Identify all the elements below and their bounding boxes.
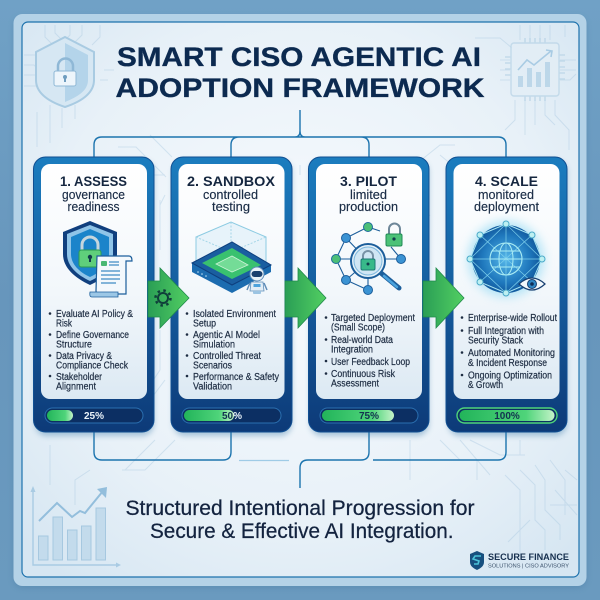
icon: logo shield — [470, 551, 484, 570]
tagline — [126, 497, 475, 543]
bullet list: Controlled Threat — [193, 351, 261, 362]
bullet list — [49, 309, 133, 392]
heading: 3. PILOT — [340, 174, 398, 189]
bottom connector lines — [94, 432, 506, 488]
bullet list: Security Stack — [468, 336, 524, 346]
bullet list — [461, 313, 557, 391]
subtitle: readiness — [68, 200, 120, 214]
arrow 2 — [285, 268, 326, 328]
bullet list: Risk — [56, 318, 73, 330]
tagline: Secure & Effective AI Integration. — [150, 520, 454, 543]
decorative shield icon — [36, 37, 94, 107]
bullet list: Scenarios — [193, 360, 232, 372]
bullet list: Real-world Data — [331, 335, 393, 346]
subtitle: limited — [350, 188, 387, 202]
bullet list: Stakeholder — [56, 372, 103, 383]
bullet list — [325, 313, 415, 390]
panel: card 3 pilot — [308, 157, 429, 436]
bullet list: Alignment — [56, 382, 96, 392]
heading: 2. SANDBOX — [187, 174, 275, 189]
bullet list: Setup — [193, 318, 216, 330]
panel: card 4 scale — [446, 157, 567, 436]
bullet list: Validation — [193, 382, 232, 392]
arrow 3 — [423, 268, 464, 328]
bullet list: Evaluate AI Policy & — [56, 309, 133, 320]
bullet list: Compliance Check — [56, 360, 129, 372]
bullet list: Enterprise-wide Rollout — [468, 313, 557, 324]
lock — [54, 58, 76, 86]
heading: 1. ASSESS — [60, 174, 127, 189]
title: SMART CISO AGENTIC AI — [117, 42, 481, 72]
progress bar 100% — [457, 408, 557, 423]
bullet list: Data Privacy & — [56, 351, 112, 362]
top connector lines — [94, 110, 506, 157]
bullet list: Isolated Environment — [193, 309, 276, 320]
bullet list: Targeted Deployment — [331, 313, 415, 324]
logo: secure finance — [470, 551, 570, 570]
arrow 1 with gear — [148, 268, 189, 328]
progress bar 50% — [182, 408, 281, 423]
icon: global network with eye — [467, 221, 545, 297]
bullet list: (Small Scope) — [331, 322, 385, 334]
icon: gear — [156, 290, 170, 306]
progress bar 25%: 25% — [84, 411, 104, 422]
progress bar 100%: 100% — [494, 411, 520, 422]
tagline: Structured Intentional Progression for — [126, 497, 475, 520]
title: ADOPTION FRAMEWORK — [116, 73, 485, 103]
heading: 4. SCALE — [475, 174, 538, 189]
progress bar 50%: 50% — [222, 411, 242, 422]
progress bar 75%: 75% — [359, 411, 379, 422]
subtitle: production — [339, 200, 398, 214]
icon: shield with lock and policy scroll — [63, 221, 132, 297]
subtitle: monitored — [478, 188, 534, 202]
bullet list: Agentic AI Model — [193, 330, 260, 341]
progress bar 75% — [320, 408, 418, 423]
bullet list — [186, 309, 279, 392]
bullet list: User Feedback Loop — [331, 357, 410, 368]
title — [116, 42, 485, 103]
decorative chip chart icon — [505, 38, 565, 101]
icon: sandbox platform with robot — [192, 222, 271, 294]
panel: card 1 assess — [34, 157, 154, 436]
subtitle — [474, 188, 540, 214]
bullet list: & Growth — [468, 380, 503, 391]
bullet list: & Incident Response — [468, 358, 547, 369]
subtitle: governance — [62, 188, 125, 202]
logo text — [488, 552, 570, 570]
logo text: SECURE FINANCE — [488, 552, 569, 563]
bullet list: Ongoing Optimization — [468, 370, 552, 382]
bullet list: Continuous Risk — [331, 369, 396, 380]
bullet list: Performance & Safety — [193, 372, 279, 383]
bullet list: Define Governance — [56, 330, 129, 341]
logo text: SOLUTIONS | CISO ADVISORY — [488, 564, 570, 570]
bullet list: Automated Monitoring — [468, 348, 555, 359]
subtitle: testing — [212, 200, 250, 214]
progress bar 25% — [45, 408, 143, 423]
bullet list: Simulation — [193, 340, 235, 350]
subtitle: controlled — [203, 188, 258, 202]
subtitle: deployment — [474, 200, 540, 214]
bullet list: Structure — [56, 340, 92, 350]
bullet list: Integration — [331, 344, 373, 356]
bullet list: Assessment — [331, 378, 379, 390]
subtitle — [339, 188, 398, 214]
subtitle — [62, 188, 125, 214]
subtitle — [203, 188, 258, 214]
panel: card 2 sandbox — [171, 157, 292, 436]
bullet list: Full Integration with — [468, 326, 544, 337]
decorative growth chart — [30, 486, 121, 568]
icon: network with magnifier and lock — [332, 222, 406, 294]
